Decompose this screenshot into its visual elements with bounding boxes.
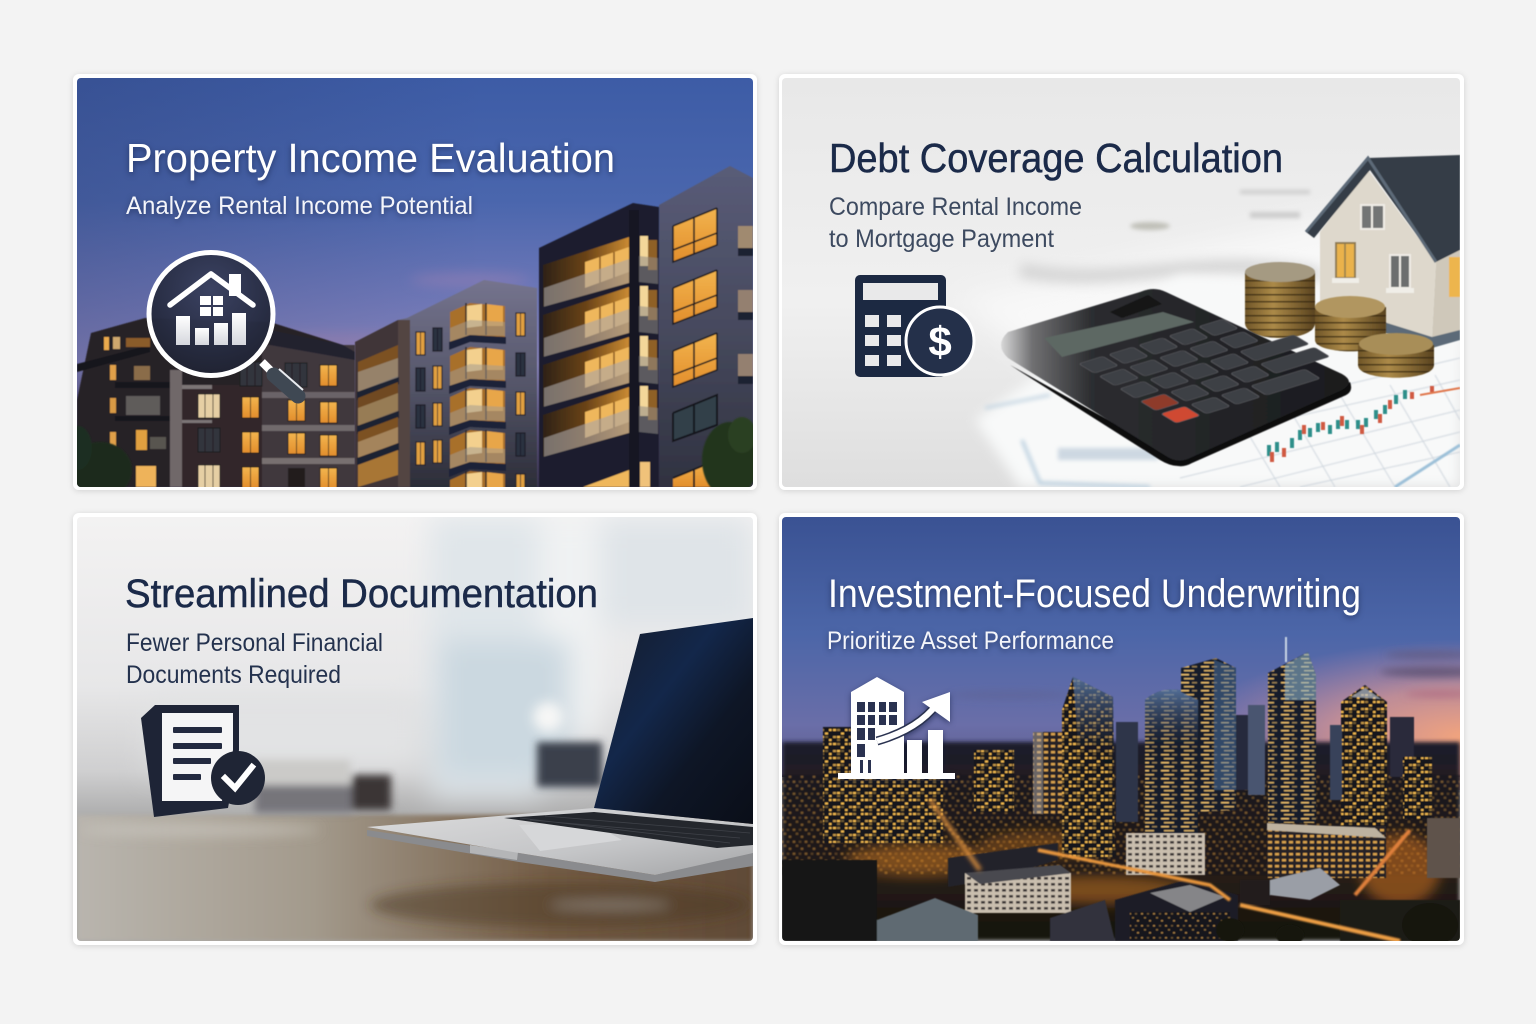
subheading: fewer personal financial: Fewer Personal Financial — [126, 629, 383, 657]
heading: property income evaluation: Property Income Evaluation — [126, 135, 615, 181]
calculator — [1001, 289, 1351, 466]
panel: property income evaluation — [64, 74, 758, 518]
icon: calculator with dollar coin: $ — [928, 318, 952, 365]
heading: streamlined documentation: Streamlined Documentation — [125, 572, 598, 616]
subheading: analyze rental income: Analyze Rental Income Potential — [126, 192, 473, 220]
subheading: compare rental income: Compare Rental Income — [829, 193, 1082, 221]
skyscrapers — [823, 637, 1432, 857]
spreadsheet paper and chart — [975, 275, 1460, 487]
wooden desk — [77, 815, 753, 941]
subheading: prioritize asset performance: Prioritize Asset Performance — [827, 627, 1114, 655]
panel: streamlined documentation — [73, 513, 757, 945]
heading: investment-focused underwriting: Investment-Focused Underwriting — [828, 572, 1361, 616]
trees — [77, 416, 753, 487]
right apartment tower — [659, 166, 753, 487]
subheading: to mortgage payment: to Mortgage Payment — [829, 225, 1054, 253]
panel: investment-focused underwriting — [779, 513, 1490, 947]
middle apartment tower — [354, 280, 538, 487]
left brick building — [77, 318, 355, 489]
icon: calculator with dollar coin — [855, 275, 974, 377]
panel: debt coverage calculation — [779, 74, 1464, 490]
low-rise buildings and streets — [782, 800, 1460, 947]
model house — [1306, 155, 1460, 348]
laptop — [367, 618, 753, 882]
icon: building with growth arrow — [838, 677, 955, 779]
gold coin stacks — [1245, 262, 1434, 378]
heading: debt coverage calculation: Debt Coverage Calculation — [829, 135, 1283, 181]
blurred books and cup — [255, 742, 602, 813]
night city mass — [782, 742, 1460, 941]
subheading: documents required: Documents Required — [126, 661, 341, 689]
icon: documents with check badge — [141, 705, 265, 817]
icon: magnifying glass over house and bars — [149, 252, 303, 396]
dark balcony tower — [539, 203, 659, 487]
blurred window background — [239, 517, 753, 812]
